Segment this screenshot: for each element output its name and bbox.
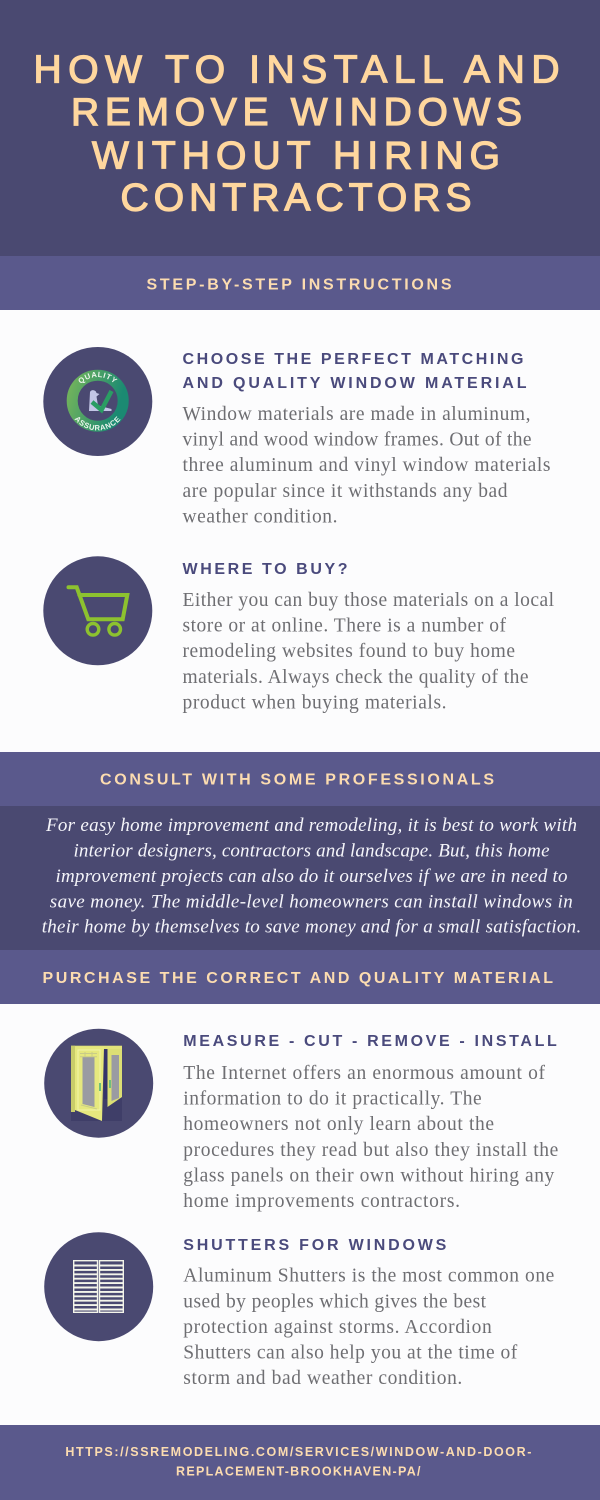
text: measure cut remove install: information to do it practically. The xyxy=(183,1089,482,1110)
text: shutters for windows: protection against storms. Accordion xyxy=(183,1317,492,1338)
text: measure cut remove install: procedures they read but also they install the xyxy=(183,1140,558,1161)
text: choose material: three aluminum and vinyl window materials xyxy=(182,455,550,476)
text: shutters for windows: storm and bad weather condition. xyxy=(183,1368,462,1389)
heading: shutters for windows: SHUTTERS FOR WINDOWS xyxy=(183,1237,447,1254)
section band: consult with some professionals xyxy=(0,752,600,806)
text: choose material: vinyl and wood window frames. Out of the xyxy=(182,430,532,451)
title: WITHOUT HIRING xyxy=(92,134,500,177)
section band: purchase material xyxy=(0,950,600,1004)
heading: where to buy: WHERE TO BUY? xyxy=(182,561,348,578)
text: where to buy: store or at online. There is a number of xyxy=(182,616,506,637)
icon: quality assurance badge xyxy=(43,347,152,456)
panel: consult paragraph: improvement projects can also do it ourselves if we are in need to xyxy=(56,866,568,887)
title: REMOVE WINDOWS xyxy=(71,91,522,134)
panel: consult paragraph: their home by themselves to save money and for a small satisfaction. xyxy=(42,917,581,938)
text: choose material: are popular since it withstands any bad xyxy=(182,481,508,502)
text: measure cut remove install: The Internet offers an enormous amount of xyxy=(183,1063,546,1084)
icon: quality assurance badge: ASSURANCE xyxy=(74,416,120,430)
icon: shutters xyxy=(44,1232,153,1341)
text: where to buy: product when buying materials. xyxy=(182,692,446,713)
text: measure cut remove install: homeowners not only learn about the xyxy=(183,1114,494,1135)
heading: choose material: AND QUALITY WINDOW MATERIAL xyxy=(182,375,527,392)
title: CONTRACTORS xyxy=(120,177,472,220)
title: HOW TO INSTALL AND xyxy=(34,49,560,92)
text: measure cut remove install: glass panels on their own without hiring any xyxy=(183,1165,555,1186)
panel: consult paragraph: interior designers, contractors and landscape. But, this home xyxy=(74,841,550,862)
section band: step-by-step instructions: STEP-BY-STEP INSTRUCTIONS xyxy=(146,276,452,293)
text: choose material xyxy=(182,404,550,527)
panel: header xyxy=(0,0,600,256)
icon: shopping cart xyxy=(43,556,152,665)
text: where to buy xyxy=(182,590,555,713)
panel: consult paragraph: save money. The middle-level homeowners can install windows in xyxy=(50,892,573,913)
text: choose material: weather condition. xyxy=(182,506,338,527)
panel: consult paragraph: For easy home improvement and remodeling, it is best to work with xyxy=(45,815,577,836)
panel: where to buy xyxy=(43,556,555,713)
section band: purchase material: PURCHASE THE CORRECT AND QUALITY MATERIAL xyxy=(42,970,553,987)
icon: open window xyxy=(44,1029,153,1138)
heading: measure cut remove install: MEASURE - CUT - REMOVE - INSTALL xyxy=(183,1033,557,1050)
text: shutters for windows xyxy=(183,1266,554,1389)
panel: choose material xyxy=(43,347,550,527)
text: measure cut remove install xyxy=(183,1063,558,1212)
footer: source url: HTTPS://SSREMODELING.COM/SERVICES/WINDOW-AND-DOOR- xyxy=(65,1445,531,1459)
section band: step-by-step instructions xyxy=(0,256,600,310)
text: where to buy: materials. Always check the quality of the xyxy=(182,667,528,688)
footer: source url: REPLACEMENT-BROOKHAVEN-PA/ xyxy=(176,1464,421,1478)
panel: measure cut remove install xyxy=(44,1029,558,1212)
text: shutters for windows: used by peoples which gives the best xyxy=(183,1291,487,1312)
text: where to buy: Either you can buy those materials on a local xyxy=(182,590,555,611)
panel: shutters for windows xyxy=(44,1232,554,1389)
text: measure cut remove install: home improvements contractors. xyxy=(183,1191,460,1212)
text: where to buy: remodeling websites found to buy home xyxy=(182,641,515,662)
text: shutters for windows: Aluminum Shutters is the most common one xyxy=(183,1266,554,1287)
title xyxy=(34,49,560,220)
footer: source url xyxy=(0,1425,600,1500)
text: shutters for windows: Shutters can also help you at the time of xyxy=(183,1342,518,1364)
heading: choose material: CHOOSE THE PERFECT MATCHING xyxy=(182,351,524,368)
heading: choose material xyxy=(182,351,527,392)
icon: quality assurance badge: QUALITY xyxy=(78,372,118,383)
panel: consult paragraph xyxy=(0,806,600,950)
text: choose material: Window materials are made in aluminum, xyxy=(182,404,530,425)
section band: consult with some professionals: CONSULT WITH SOME PROFESSIONALS xyxy=(100,771,494,788)
